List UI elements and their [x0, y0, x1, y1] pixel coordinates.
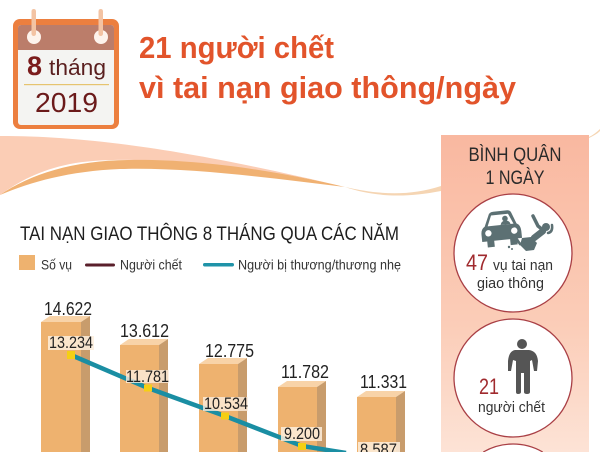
panel heading: 1 NGÀY: [486, 168, 545, 189]
legend: Người bị thương/thương nhẹ: [238, 256, 401, 272]
data label 13.234: [48, 336, 94, 350]
icon: calendar: 8: [27, 51, 42, 81]
bar chart: số vụ: [41, 299, 407, 452]
legend: Người chết: [120, 256, 182, 272]
data label 9.200: [281, 427, 322, 441]
icon: car and motorbike crash: [479, 209, 552, 251]
decorative swoosh: header wave: [0, 129, 600, 196]
icon: calendar: 2019: [35, 87, 98, 118]
icon: calendar: tháng: [49, 55, 106, 80]
circle: 21 người chết: 21: [479, 374, 499, 399]
bar 2017: [199, 341, 254, 452]
data label 9.200: 9.200: [284, 424, 320, 443]
data label 11.781: 11.781: [126, 367, 169, 386]
data label 13.234: 13.234: [49, 333, 93, 352]
legend: Số vụ: [41, 256, 72, 272]
title: vì tai nạn giao thông/ngày: [139, 70, 517, 105]
circle: người bị thương (cropped): [483, 444, 543, 452]
bar 2019: 11.331: [360, 372, 407, 392]
legend: [19, 255, 401, 272]
circle: 21 người chết: [454, 319, 572, 437]
panel heading: BÌNH QUÂN: [468, 144, 562, 166]
bar 2015: 14.622: [44, 299, 92, 319]
panel heading: [468, 144, 562, 189]
bar 2017: 12.775: [205, 341, 254, 361]
circle: 47 vụ tai nạn: vụ tai nạn: [493, 257, 553, 274]
circle: 47 vụ tai nạn: giao thông: [477, 275, 544, 292]
title: [139, 30, 517, 105]
chart heading: TAI NẠN GIAO THÔNG 8 THÁNG QUA CÁC NĂM: [20, 223, 399, 245]
icon: calendar: [13, 9, 119, 129]
bar 2018: 11.782: [281, 362, 329, 382]
bar 2019: [357, 372, 407, 452]
data label 11.781: [126, 370, 169, 383]
data label 10.534: 10.534: [204, 394, 248, 413]
icon: person: [508, 339, 538, 394]
title: 21 người chết: [139, 30, 334, 65]
bar 2016: 13.612: [120, 321, 169, 341]
circle: 47 vụ tai nạn: [454, 194, 572, 312]
bar 2016: [120, 321, 169, 452]
panel: bình quân 1 ngày: [441, 135, 589, 452]
line chart: người bị thương: [48, 333, 400, 452]
bar 2018: [278, 362, 329, 452]
bar 2015: [41, 299, 92, 452]
circle: 21 người chết: người chết: [478, 399, 546, 416]
data label 10.534: [203, 397, 248, 411]
circle: 47 vụ tai nạn: 47: [466, 250, 488, 275]
